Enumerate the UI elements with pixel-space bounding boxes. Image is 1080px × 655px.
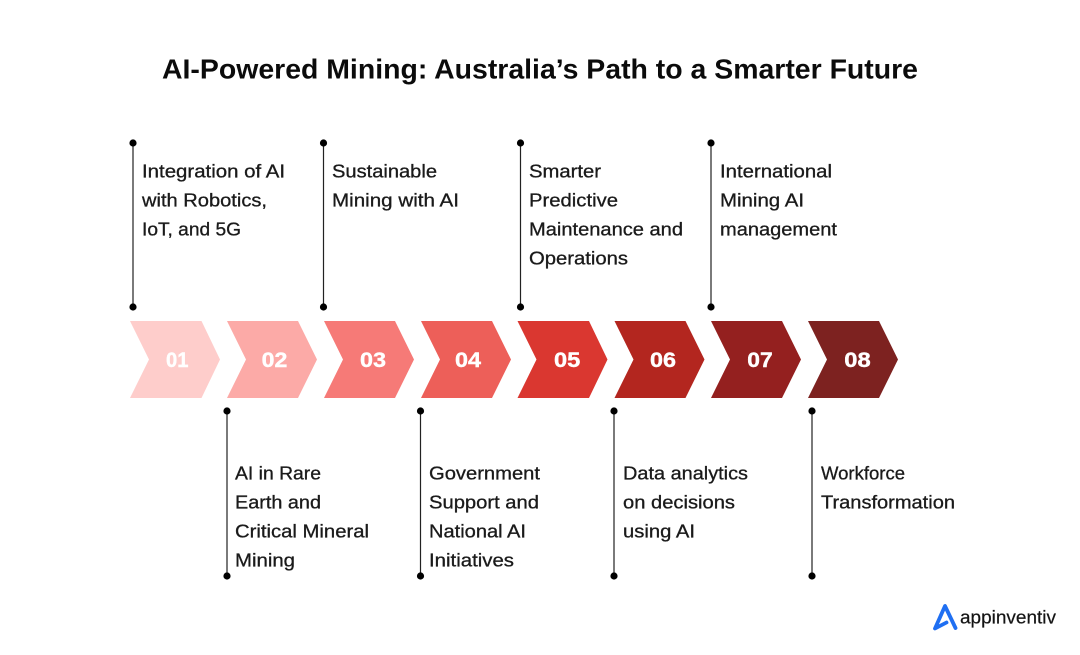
chevron 07: 07 [747, 348, 773, 372]
text 02 [235, 462, 369, 570]
chevron 02: 02 [262, 348, 287, 372]
text 01: Integration of AI [142, 160, 285, 182]
chevron 08: 08 [844, 348, 871, 372]
text 06: on decisions [623, 492, 735, 512]
text 05: Operations [529, 248, 628, 268]
text 05 [529, 160, 683, 268]
logo: appinventiv [935, 606, 1057, 628]
text 04: Support and [429, 492, 539, 512]
text 04: Government [429, 462, 540, 484]
chevron 05: 05 [554, 348, 580, 372]
text 04: Initiatives [429, 550, 514, 570]
text 05: Maintenance and [529, 218, 683, 240]
chevron timeline [130, 321, 898, 398]
text 01 [141, 160, 285, 240]
chevron 03 [324, 321, 414, 398]
text 05: Smarter [529, 160, 601, 182]
chevron 03: 03 [360, 348, 386, 372]
chevron 01: 01 [166, 348, 189, 372]
chevron 04 [421, 321, 511, 398]
chevron 08 [808, 321, 898, 398]
text 05: Predictive [529, 190, 618, 210]
text 02: Earth and [235, 492, 321, 512]
text 04: National AI [429, 520, 526, 542]
connector 07 [707, 139, 715, 311]
text 02: Mining [235, 550, 295, 570]
chevron 06 [614, 321, 704, 398]
text 06 [623, 462, 748, 542]
text 07: Mining AI [720, 190, 804, 210]
chevron 06: 06 [650, 348, 676, 372]
text 01: with Robotics, [141, 190, 267, 210]
chevron 04: 04 [455, 348, 481, 372]
title: AI-Powered Mining: Australia’s Path to a Smarter Future [162, 54, 918, 84]
text 04 [429, 462, 540, 570]
text 03: Mining with AI [332, 190, 459, 210]
text 07: management [720, 218, 837, 240]
text 08: Transformation [821, 492, 955, 512]
connector 04 [417, 407, 424, 580]
chevron 05 [518, 321, 608, 398]
text 02: AI in Rare [235, 462, 321, 484]
connector 08 [808, 407, 816, 580]
connector 06 [610, 407, 618, 580]
logo wordmark: appinventiv [960, 606, 1057, 628]
text 07: International [720, 160, 832, 182]
text 01: IoT, and 5G [142, 218, 241, 240]
text 03 [332, 160, 459, 210]
text 08: Workforce [821, 462, 905, 484]
chevron 02 [227, 321, 317, 398]
text 08 [821, 462, 955, 512]
text 06: Data analytics [623, 462, 748, 484]
connector 02 [223, 407, 231, 580]
text 03: Sustainable [332, 160, 437, 182]
chevron 07 [711, 321, 801, 398]
chevron 01 [130, 321, 220, 398]
icon: logo mark [935, 606, 956, 628]
connector 03 [320, 139, 327, 311]
text 02: Critical Mineral [235, 520, 369, 542]
connector 05 [517, 139, 524, 311]
text 06: using AI [623, 520, 695, 542]
connector 01 [129, 139, 137, 311]
text 07 [720, 160, 837, 240]
